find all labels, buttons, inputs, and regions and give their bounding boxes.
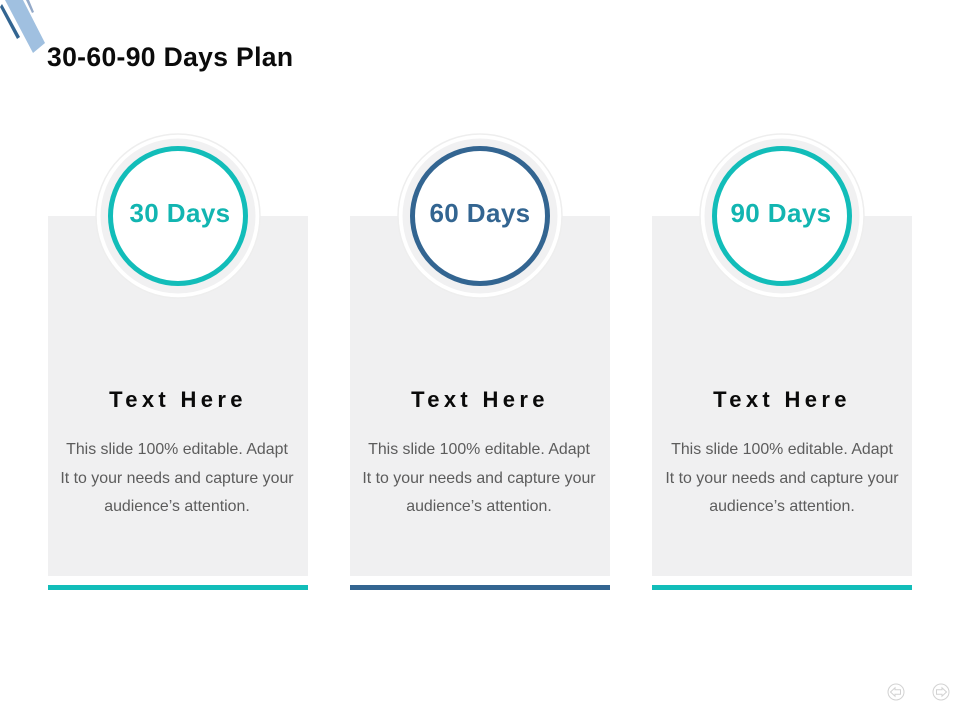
panel: 60 days [350,216,610,590]
icon: previous arrow [888,684,904,700]
panel background [350,216,610,576]
circle: 60 days [398,134,562,297]
text block: column 3: audience’s attention. [709,498,855,515]
label: 60 days: 60 Days [429,198,531,228]
accent bar [652,585,912,590]
accent bar [48,585,308,590]
accent bar [350,585,610,590]
text block: column 2: It to your needs and capture your [362,470,596,486]
heading: column 2: Text Here [411,387,549,412]
text block: column 3: This slide 100% editable. Adapt [671,441,893,458]
text block: column 2 [362,441,596,515]
text block: column 2: audience’s attention. [406,498,552,515]
text block: column 1: It to your needs and capture your [60,470,294,486]
icon: next arrow [932,684,950,700]
panel: 30 days [48,216,308,590]
decorative corner: blue stripes [0,0,45,53]
label: 30 days: 30 Days [129,198,231,228]
heading: column 3: Text Here [713,387,851,412]
text block: column 1: audience’s attention. [104,498,250,515]
text block: column 3: It to your needs and capture your [665,470,899,486]
text block: column 3 [665,441,899,515]
panel background [652,216,912,576]
circle: 30 days [96,134,260,297]
text block: column 2: This slide 100% editable. Adapt [368,441,590,458]
panel: 90 days [652,216,912,590]
panel background [48,216,308,576]
circle: 90 days [700,134,864,297]
text block: column 1 [60,441,294,515]
heading: column 1: Text Here [109,387,247,412]
text block: column 1: This slide 100% editable. Adapt [66,441,288,458]
title: 30-60-90 Days Plan [47,42,293,72]
label: 90 days: 90 Days [730,198,832,228]
